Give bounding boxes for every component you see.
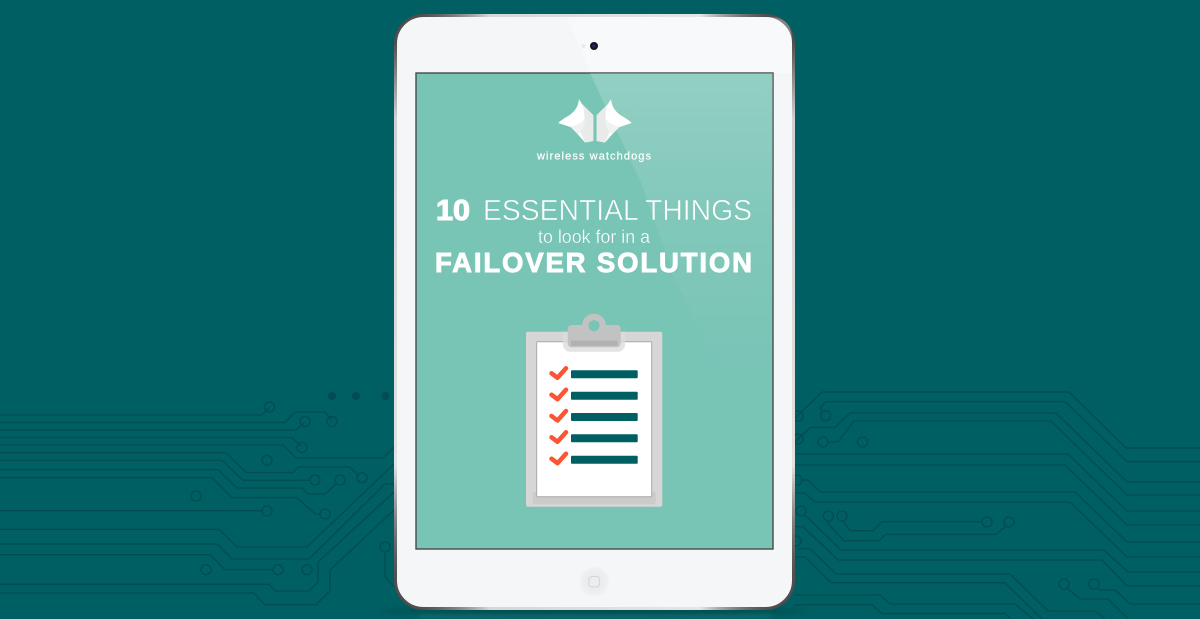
checklist	[552, 368, 638, 464]
logo: left dog head	[558, 99, 593, 142]
checklist row 2	[552, 390, 638, 400]
clipboard bottom band	[533, 492, 656, 504]
screen	[416, 73, 773, 549]
circuit traces: left	[0, 402, 394, 605]
checklist row 4	[552, 432, 638, 442]
decorative dots	[328, 392, 390, 400]
bezel glare	[567, 17, 792, 73]
logo	[536, 99, 652, 162]
checklist row 1	[552, 368, 638, 378]
logo: right dog head	[597, 99, 632, 142]
title line 1: 10	[436, 195, 470, 227]
title	[435, 195, 752, 278]
clipboard	[526, 314, 662, 507]
clipboard paper	[537, 342, 652, 497]
tablet reflection and shadow	[382, 608, 806, 619]
title line 2: to look for in a	[538, 227, 651, 247]
screen glare	[590, 73, 773, 272]
tablet	[396, 16, 794, 608]
front camera	[582, 42, 598, 50]
logo wordmark: wireless watchdogs	[536, 150, 652, 162]
clipboard clip	[563, 314, 625, 352]
home button	[579, 567, 609, 597]
clipboard board	[526, 332, 662, 507]
title line 3: FAILOVER SOLUTION	[435, 247, 752, 278]
title line 1: ESSENTIAL THINGS	[483, 195, 752, 227]
circuit traces: right	[791, 392, 1200, 619]
tablet frame	[396, 16, 794, 608]
checklist row 5	[552, 454, 638, 464]
checklist row 3	[552, 411, 638, 421]
